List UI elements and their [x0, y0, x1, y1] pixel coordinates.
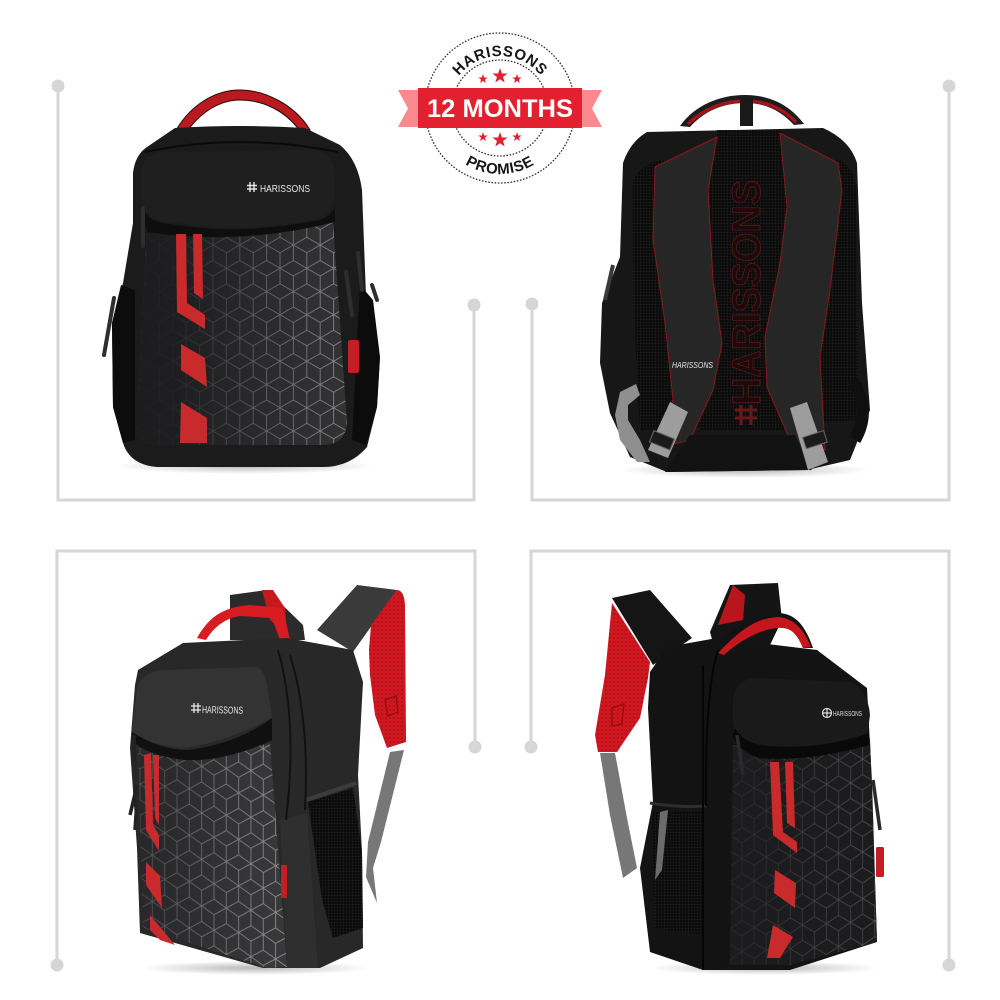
body [112, 126, 380, 467]
body [640, 638, 877, 970]
body [130, 638, 363, 968]
frame: bottom right [524, 551, 956, 972]
logo mark [735, 405, 757, 425]
top strap [710, 583, 782, 650]
lower gusset [280, 813, 318, 968]
brand name: HARISSONS [260, 184, 310, 195]
patterned panel [725, 735, 880, 970]
red pad [369, 590, 406, 748]
logo text [247, 182, 310, 195]
zipper pullers [130, 735, 137, 830]
ribbon text: 12 MONTHS [427, 95, 573, 123]
red stripes [176, 234, 207, 443]
side mesh pocket [308, 788, 363, 938]
grey strap [600, 753, 637, 878]
zipper band [132, 718, 272, 760]
top pocket [733, 678, 870, 747]
grey strap [366, 750, 404, 903]
patterned panel [138, 743, 287, 968]
strap label: HARISSONS [672, 361, 714, 370]
backpack: three-quarter right view [595, 583, 884, 975]
side webbing [655, 810, 668, 880]
badge heading: Harissons: HARISSONS [452, 46, 547, 76]
top pocket [132, 667, 272, 748]
logo text [191, 703, 243, 717]
frame: top left [52, 80, 480, 500]
centre mesh [700, 130, 790, 430]
back mesh [633, 160, 858, 430]
right shoulder pad [765, 133, 842, 450]
body [600, 128, 870, 472]
top strap [230, 590, 305, 640]
bottom panel [665, 435, 812, 472]
handle [197, 605, 290, 640]
handle [712, 613, 813, 655]
red tag [876, 847, 884, 877]
zipper pullers [737, 735, 880, 830]
stars [478, 68, 522, 146]
red stripes [144, 753, 175, 945]
backpack: back view [600, 95, 870, 478]
left side zipper [605, 265, 613, 300]
zipper band [142, 206, 335, 237]
left grey loop [615, 384, 650, 462]
red tag [281, 865, 287, 898]
frame: bottom left [50, 551, 482, 972]
red pad [595, 603, 650, 752]
zipper band [733, 728, 869, 759]
frame: top right [526, 80, 956, 500]
left shoulder pad [650, 137, 722, 450]
right strap curl [852, 380, 863, 440]
left webbing and buckle [648, 402, 688, 458]
zipper pullers [104, 208, 377, 355]
vertical embroidered brand: HARISSONS [725, 180, 769, 405]
pad stitching [385, 696, 398, 716]
right webbing and buckle [790, 402, 828, 470]
side seam [703, 650, 718, 970]
handle [175, 90, 310, 133]
top seam [145, 142, 338, 152]
red stripes [767, 762, 797, 958]
ribbon [398, 88, 602, 128]
right shoulder strap [317, 585, 397, 652]
badge heading: Promise: PROMISE [466, 156, 534, 174]
brand name: HARISSONS [833, 709, 862, 718]
backpack: three-quarter left view [130, 585, 406, 975]
pocket hem [306, 783, 356, 800]
badge: 12 months promise [398, 32, 602, 184]
backpack: front view [104, 90, 380, 474]
red tag [348, 340, 359, 373]
mesh pocket right [352, 285, 380, 445]
pocket hem [650, 803, 706, 807]
pad stitching [612, 704, 624, 726]
patterned panel [137, 222, 347, 445]
mesh pocket left [112, 285, 135, 443]
brand name: HARISSONS [202, 705, 243, 717]
top pocket [141, 150, 334, 228]
handle [680, 95, 804, 127]
side seams [278, 650, 306, 820]
side mesh pocket [653, 812, 703, 935]
logo text [822, 708, 862, 718]
center strap [740, 98, 753, 126]
left shoulder strap [612, 590, 692, 665]
